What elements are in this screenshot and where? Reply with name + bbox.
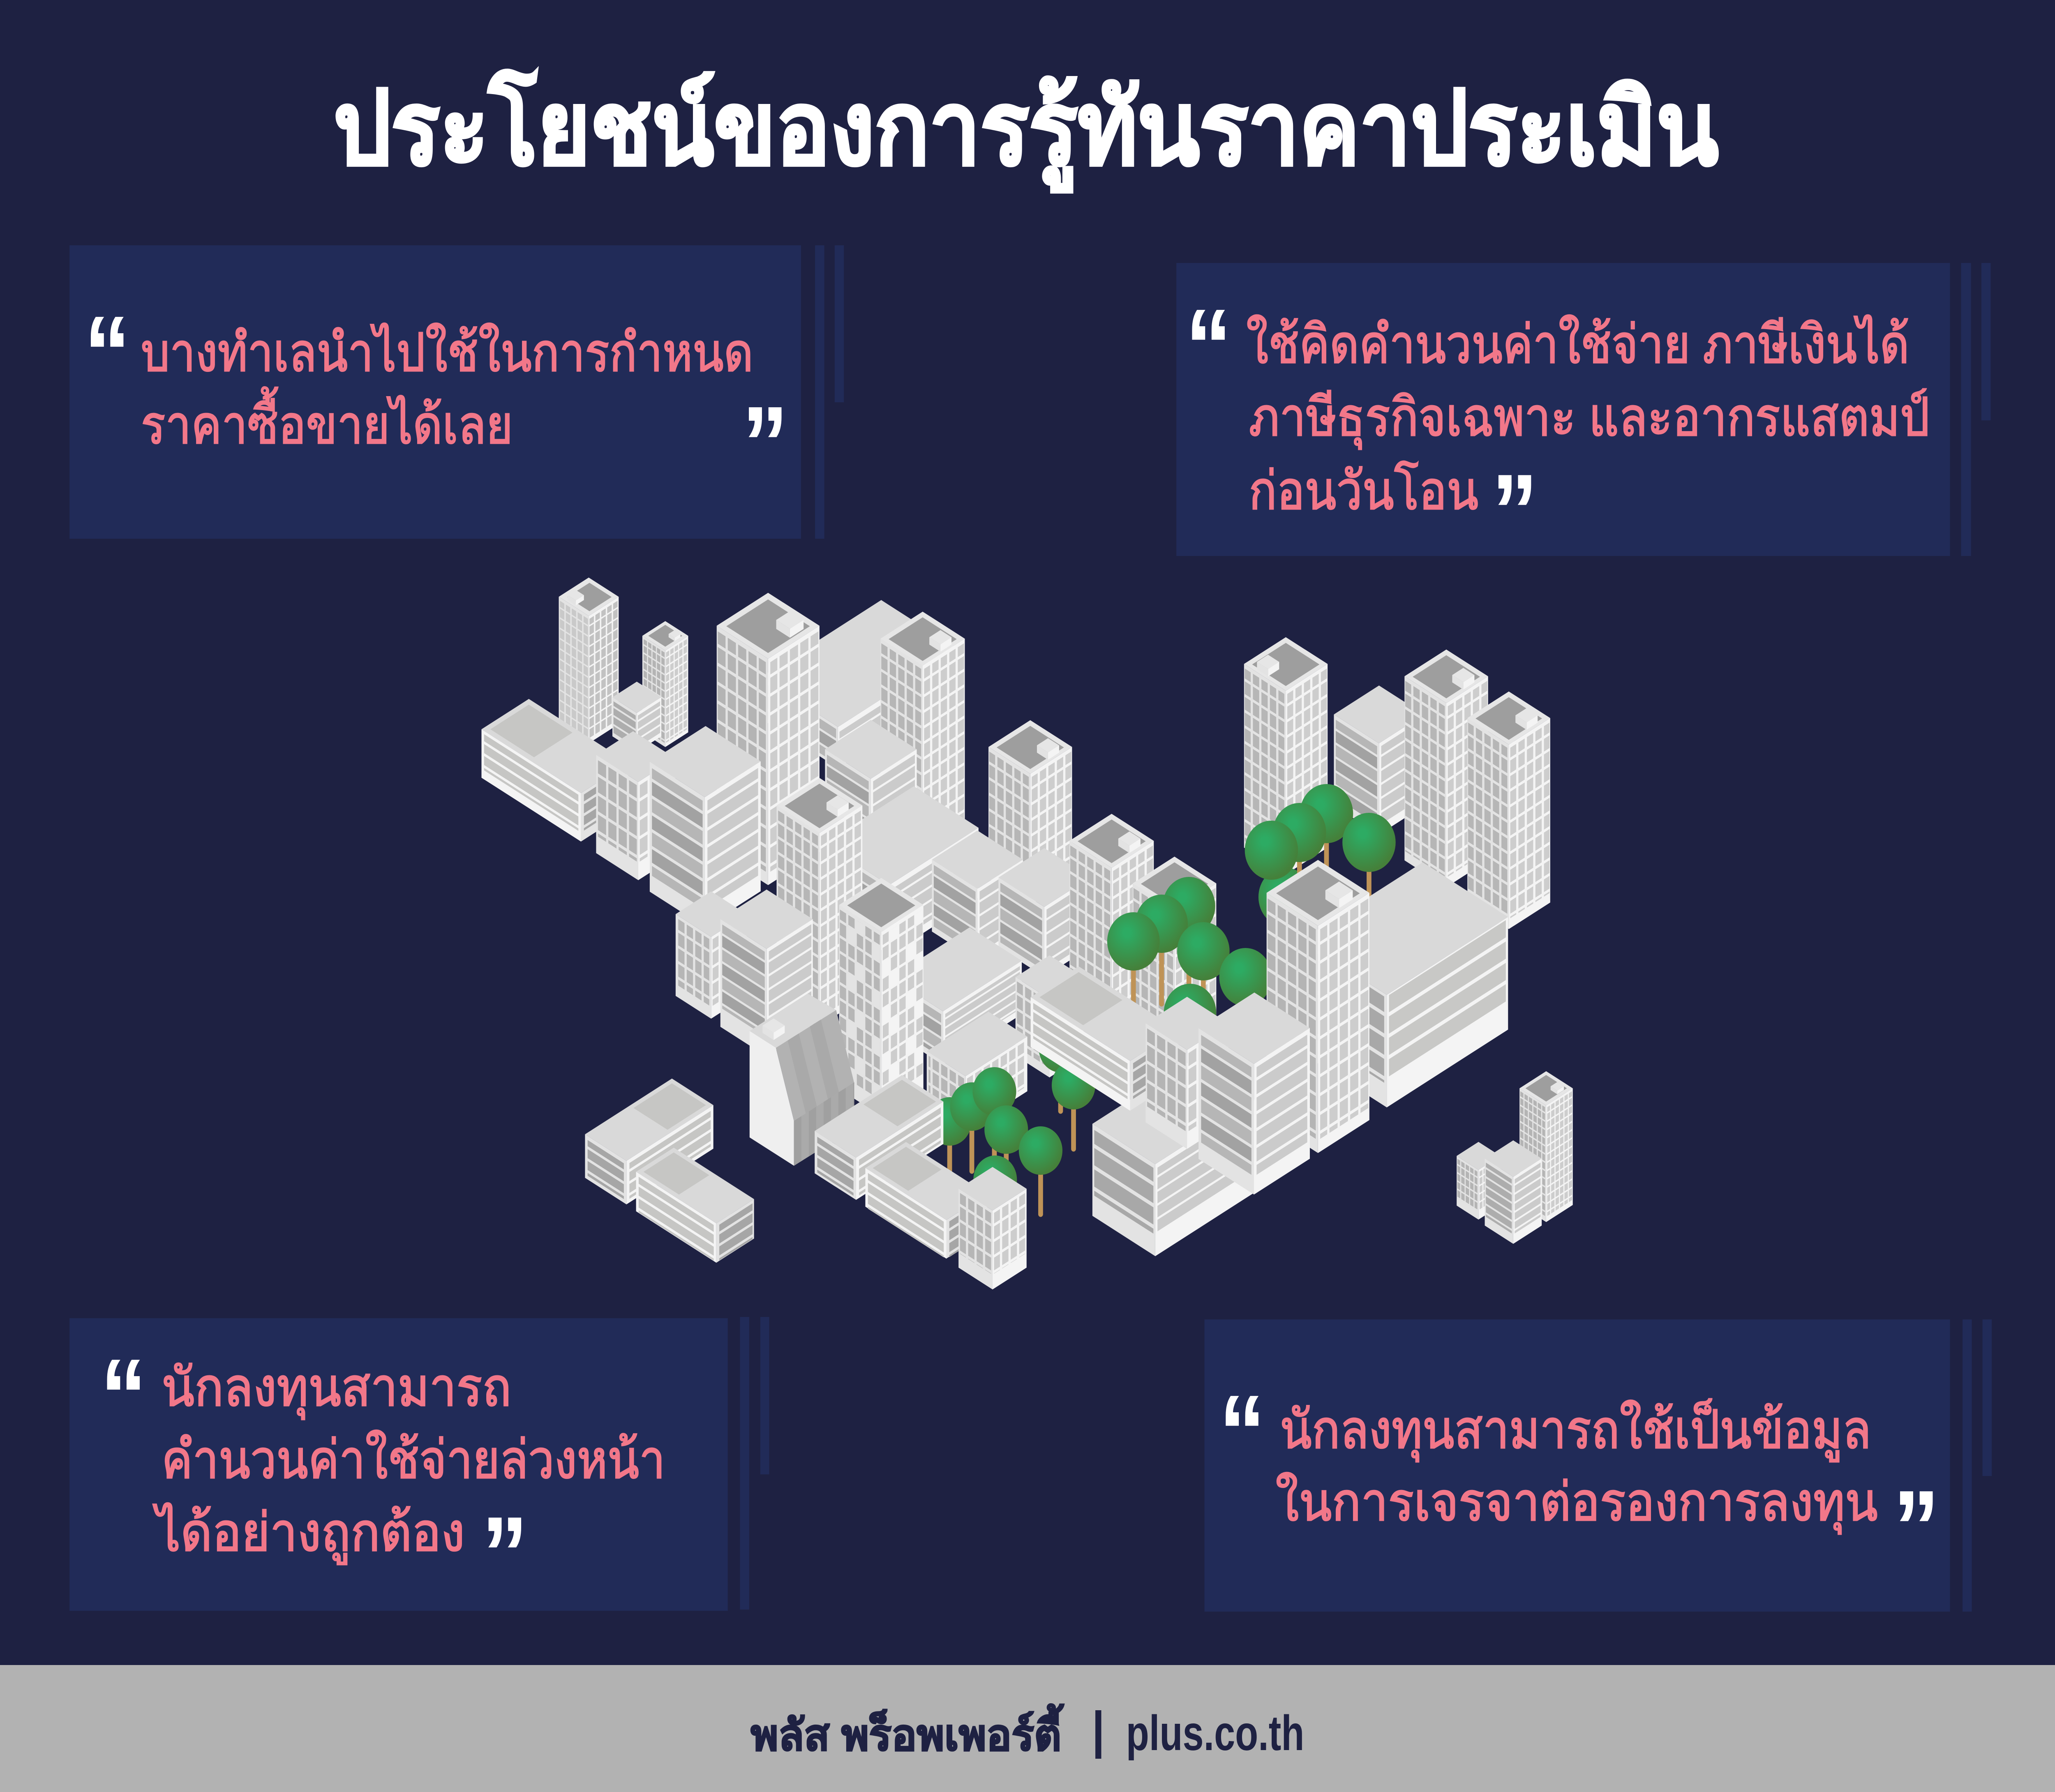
building: strip block lower centre: [891, 927, 1022, 1065]
building: strip block: [650, 726, 761, 927]
quote text: ก่อนวันโอน: [1249, 461, 1478, 521]
closing quote mark: ”: [1893, 1469, 1940, 1587]
panel: top right quote: [1176, 263, 1990, 570]
quote text: ได้อย่างถูกต้อง: [152, 1503, 465, 1565]
building: hall with sloped facade: [750, 994, 854, 1166]
building: tower right middle: [1069, 814, 1154, 1040]
building: small tower: [642, 621, 688, 747]
building: tiny strip block far right: [1485, 1140, 1542, 1244]
closing quote mark: ”: [1492, 452, 1538, 570]
opening quote mark: “: [84, 294, 131, 412]
building: tiny grid block far right: [1457, 1142, 1500, 1220]
panel: top left quote: [69, 245, 844, 539]
building: tower with fine grid: [777, 778, 862, 1026]
quote text: ใช้คิดคำนวนค่าใช้จ่าย ภาษีเงินได้: [1246, 315, 1909, 374]
building: tiny tower far right: [1519, 1071, 1573, 1222]
building: grid block front left: [676, 891, 747, 1019]
building: low block: [612, 682, 661, 752]
quote text: ภาษีธุรกิจเฉพาะ และอากรแสตมป์: [1249, 387, 1930, 450]
trees: lower grove: [928, 1024, 1095, 1214]
building: small grid block: [1016, 955, 1083, 1077]
quote text: นักลงทุนสามารถใช้เป็นข้อมูล: [1280, 1398, 1871, 1462]
panel: bottom left quote: [69, 1317, 769, 1613]
quote text: [141, 323, 753, 455]
building: thin tower: [559, 578, 619, 743]
footer brand name: พลัส พร็อพเพอร์ตี้: [751, 1703, 1064, 1760]
building: low bar bottom left a: [585, 1079, 713, 1204]
building: back right tower c: [1467, 692, 1550, 929]
building: checker tower: [839, 878, 924, 1116]
building: long low bar centre: [1031, 966, 1178, 1111]
quote text: นักลงทุนสามารถ: [162, 1358, 511, 1420]
trees: central grove: [1107, 877, 1272, 1042]
building: strip block right of centre: [1198, 992, 1310, 1195]
building: large tower: [717, 593, 820, 885]
quote text: ในการเจรจาต่อรองการลงทุน: [1275, 1472, 1878, 1535]
closing quote mark: ”: [481, 1495, 528, 1613]
building: low bar bottom left b: [636, 1148, 754, 1263]
building: grid low block: [927, 1012, 1028, 1131]
building: back right strip block: [1334, 685, 1424, 835]
building: back right tower b: [1404, 650, 1488, 887]
title: ประโยชน์ของการรู้ทันราคาประเมิน: [334, 69, 1718, 192]
building: long low left: [481, 699, 628, 842]
building: tall tower right: [1267, 860, 1369, 1153]
quote text: [1275, 1398, 1878, 1535]
quote text: คำนวนค่าใช้จ่ายล่วงหน้า: [162, 1430, 665, 1490]
building: small grid block front: [958, 1167, 1027, 1289]
building: tower centre: [988, 720, 1072, 905]
footer website: plus.co.th: [1126, 1706, 1304, 1761]
footer divider: [1095, 1710, 1101, 1759]
illustration: isometric city: [481, 578, 1573, 1289]
building: wide flat back: [761, 600, 958, 768]
quote text: [152, 1358, 665, 1565]
building: strip block centre: [932, 830, 1023, 961]
quote text: ราคาซื้อขายได้เลย: [141, 387, 513, 455]
footer bar: [0, 1665, 2055, 1792]
trees: upper grove: [1245, 784, 1396, 927]
building: tower behind trees: [1133, 857, 1216, 1042]
quote text: [1246, 315, 1930, 521]
building: grid block: [596, 731, 675, 880]
panel: bottom right quote: [1205, 1319, 1992, 1612]
building: low bar bottom centre b: [865, 1142, 987, 1259]
closing quote mark: ”: [742, 385, 788, 503]
quote text: บางทำเลนำไปใช้ในการกำหนด: [141, 323, 753, 383]
building: low block under long bar: [1092, 1060, 1255, 1256]
building: big low block right: [1301, 862, 1508, 1107]
opening quote mark: “: [1185, 287, 1232, 405]
building: strip block centre right: [998, 848, 1090, 977]
building: back right tower a: [1244, 637, 1328, 874]
building: low bar bottom centre a: [815, 1075, 943, 1200]
building: tower right of centre back: [880, 611, 965, 859]
building: wide flat middle: [824, 786, 979, 955]
opening quote mark: “: [100, 1337, 147, 1455]
opening quote mark: “: [1219, 1373, 1265, 1491]
building: grid block right of centre: [1145, 997, 1228, 1149]
building: strip block front left: [720, 890, 813, 1056]
building: low strip block: [825, 720, 917, 834]
